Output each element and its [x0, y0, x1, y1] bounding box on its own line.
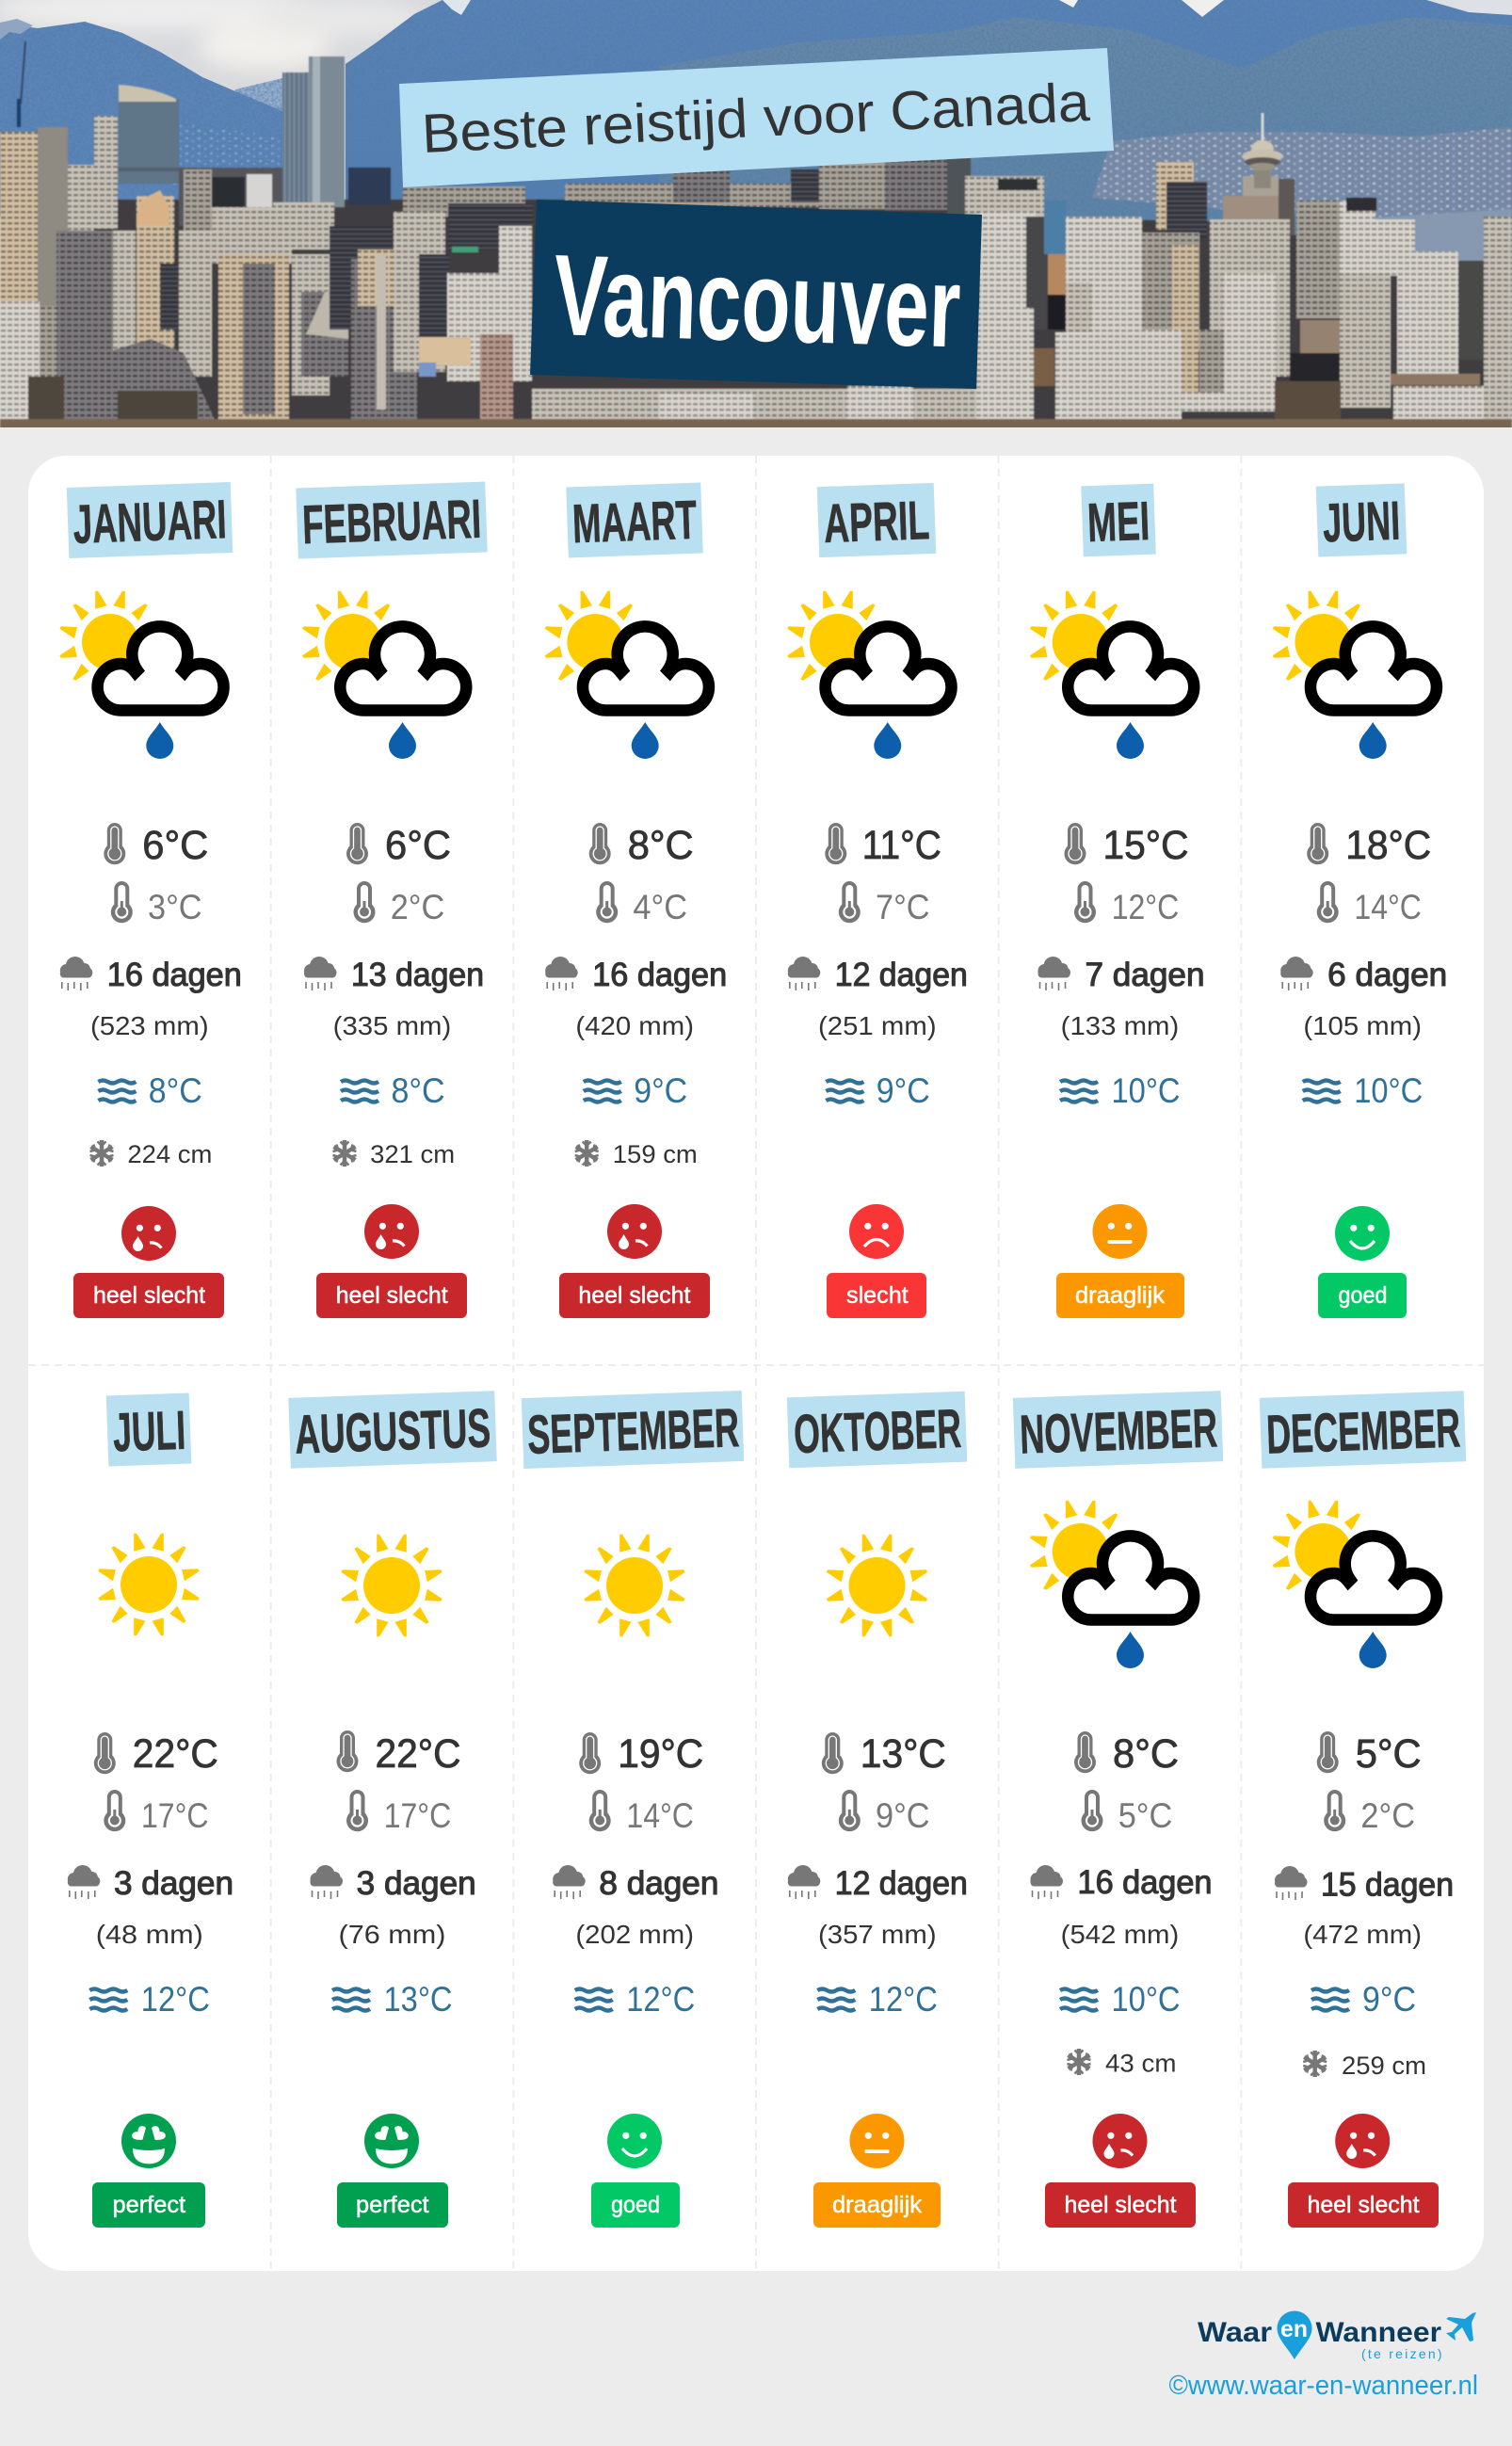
- rain days: 12 dagen: [835, 957, 968, 993]
- rating badge: [337, 2182, 448, 2228]
- water temperature: 9°C: [877, 1071, 930, 1110]
- rainfall: (335 mm): [333, 1011, 451, 1040]
- rating badge: [1056, 1273, 1184, 1318]
- rainfall: (76 mm): [339, 1920, 446, 1949]
- rating badge: goed: [1339, 1282, 1388, 1309]
- logo: Waar en Wanneer: en: [1280, 2316, 1308, 2342]
- max temperature: 18°C: [1345, 823, 1431, 868]
- min temperature: 2°C: [391, 888, 444, 926]
- rain days: 16 dagen: [107, 957, 242, 993]
- rainfall: (48 mm): [96, 1920, 203, 1949]
- rating face: [121, 1206, 176, 1261]
- icon: airplane: [1446, 2312, 1476, 2341]
- weather icon: [1030, 591, 1194, 759]
- water temperature: [332, 1980, 452, 2019]
- rain days: 13 dagen: [351, 957, 484, 993]
- rainfall: (420 mm): [575, 1011, 694, 1040]
- month heading: [817, 483, 936, 557]
- min temperature: [1074, 881, 1179, 926]
- max temperature: [94, 1731, 218, 1777]
- max temperature: [104, 823, 208, 868]
- clouds: [0, 0, 424, 70]
- rain days: 8 dagen: [599, 1865, 718, 1902]
- weather icon: [59, 591, 224, 759]
- min temperature: 4°C: [633, 888, 687, 926]
- water temperature: [584, 1071, 687, 1110]
- rating badge: heel slecht: [1307, 2192, 1420, 2218]
- rainfall: (472 mm): [1303, 1920, 1422, 1949]
- min temperature: [596, 881, 687, 926]
- city banner: [530, 200, 982, 389]
- rating badge: heel slecht: [93, 1282, 205, 1309]
- max temperature: 8°C: [1113, 1731, 1179, 1777]
- max temperature: 22°C: [375, 1731, 461, 1777]
- rain days: 3 dagen: [357, 1865, 476, 1902]
- panel: november: [1013, 1391, 1223, 2228]
- min temperature: 14°C: [1354, 888, 1422, 926]
- panel: januari: [59, 482, 242, 1318]
- water temperature: 12°C: [626, 1980, 695, 2019]
- panel: februari: [296, 482, 488, 1318]
- water temperature: [1060, 1980, 1181, 2019]
- max temperature: 19°C: [618, 1731, 703, 1777]
- rating badge: [813, 2182, 941, 2228]
- rain days: 3 dagen: [114, 1865, 233, 1902]
- min temperature: [104, 1790, 209, 1835]
- panel: juli: [68, 1392, 233, 2228]
- rating badge: [1318, 1273, 1407, 1318]
- rating badge: heel slecht: [336, 1282, 448, 1309]
- month heading: OKTOBER: [793, 1398, 962, 1465]
- min temperature: [354, 881, 444, 926]
- skyline buildings: [0, 41, 1512, 430]
- snowfall: [90, 1140, 212, 1168]
- rain days: 16 dagen: [1077, 1864, 1213, 1901]
- month heading: MEI: [1086, 491, 1150, 554]
- weather icon: [1273, 591, 1437, 759]
- header photo: Vancouver skyline: [0, 0, 1512, 430]
- max temperature: [589, 823, 694, 868]
- month heading: [288, 1391, 497, 1469]
- water temperature: [98, 1071, 202, 1110]
- weather icon: [1273, 1501, 1437, 1668]
- water temperature: [1303, 1071, 1423, 1110]
- panel: december: [1260, 1391, 1466, 2228]
- rating face: [1092, 2114, 1147, 2168]
- month heading: JANUARI: [72, 489, 228, 555]
- min temperature: [111, 881, 202, 926]
- rating badge: [559, 1273, 710, 1318]
- min temperature: 5°C: [1118, 1796, 1172, 1835]
- rating face: [1092, 1204, 1147, 1259]
- max temperature: 8°C: [628, 823, 694, 868]
- max temperature: 5°C: [1356, 1731, 1422, 1777]
- weather icon: [98, 1534, 200, 1635]
- panel: maart: [545, 483, 727, 1318]
- rating badge: slecht: [846, 1282, 909, 1309]
- snowfall: [333, 1140, 455, 1168]
- rating badge: perfect: [113, 2192, 185, 2218]
- rainfall: (133 mm): [1061, 1011, 1179, 1040]
- water temperature: [1311, 1980, 1416, 2019]
- water temperature: 12°C: [869, 1980, 938, 2019]
- panel: augustus: [288, 1391, 497, 2228]
- water temperature: 12°C: [141, 1980, 210, 2019]
- min temperature: 2°C: [1360, 1796, 1415, 1835]
- panel: september: [522, 1391, 744, 2228]
- month heading: [1013, 1391, 1223, 1469]
- month heading: [67, 482, 233, 558]
- weather icon: [545, 591, 709, 759]
- snowfall: 259 cm: [1342, 2052, 1426, 2080]
- panel: mei: [1030, 484, 1205, 1318]
- panel: april: [787, 483, 968, 1318]
- weather icon: [341, 1535, 442, 1636]
- month heading: JUNI: [1322, 491, 1401, 554]
- snowfall: [1303, 2051, 1426, 2080]
- max temperature: 13°C: [861, 1731, 946, 1777]
- water temperature: 10°C: [1354, 1071, 1423, 1110]
- max temperature: [337, 1730, 461, 1777]
- logo: Waar en Wanneer: Waar: [1198, 2317, 1272, 2348]
- min temperature: [1317, 881, 1422, 926]
- max temperature: [822, 1731, 946, 1777]
- rainfall: (523 mm): [90, 1011, 209, 1040]
- panel: oktober: [787, 1392, 968, 2228]
- rainfall: (105 mm): [1303, 1011, 1422, 1040]
- snow patches: [0, 0, 1512, 40]
- min temperature: [1324, 1790, 1415, 1835]
- max temperature: [1064, 823, 1188, 868]
- month heading: MAART: [571, 490, 698, 555]
- rating badge: [92, 2182, 205, 2228]
- min temperature: 14°C: [626, 1796, 694, 1835]
- snowfall: 224 cm: [127, 1140, 212, 1168]
- month heading: SEPTEMBER: [526, 1397, 740, 1466]
- icon: map pin: [1277, 2310, 1312, 2359]
- max temperature: [1317, 1731, 1422, 1777]
- month heading: APRIL: [823, 490, 930, 555]
- water temperature: 8°C: [392, 1071, 444, 1110]
- water temperature: 9°C: [634, 1071, 687, 1110]
- website credit: ©www.waar-en-wanneer.nl: [1169, 2371, 1478, 2401]
- max temperature: [1074, 1731, 1179, 1777]
- max temperature: 22°C: [133, 1731, 218, 1777]
- max temperature: 6°C: [142, 823, 208, 868]
- max temperature: 15°C: [1103, 823, 1188, 868]
- water temperature: 8°C: [149, 1071, 202, 1110]
- residential hillside: [169, 122, 1512, 292]
- water temperature: [575, 1980, 695, 2019]
- weather icon: [827, 1535, 927, 1636]
- rating badge: [1288, 2182, 1439, 2228]
- rating badge: [827, 1273, 926, 1318]
- rating face: [607, 1204, 662, 1259]
- min temperature: 17°C: [384, 1796, 451, 1835]
- weather icon: [787, 591, 952, 759]
- min temperature: 12°C: [1112, 888, 1179, 926]
- rating badge: [73, 1273, 224, 1318]
- rating badge: goed: [611, 2192, 660, 2218]
- min temperature: 3°C: [148, 888, 202, 926]
- rating badge: [1045, 2182, 1196, 2228]
- city banner: Vancouver: [552, 231, 962, 372]
- max temperature: 6°C: [385, 823, 451, 868]
- rain days: 15 dagen: [1321, 1866, 1454, 1904]
- month heading: [106, 1392, 191, 1467]
- month heading: [1081, 484, 1156, 556]
- water temperature: [341, 1071, 444, 1110]
- weather icon: [302, 591, 466, 759]
- title banner: Beste reistijd voor Canada: [421, 72, 1092, 165]
- min temperature: [839, 881, 930, 926]
- panel: juni: [1273, 483, 1447, 1318]
- max temperature: [825, 823, 941, 868]
- rating face: [607, 2114, 662, 2168]
- min temperature: [839, 1790, 930, 1835]
- min temperature: [589, 1790, 694, 1835]
- rating badge: heel slecht: [578, 1282, 690, 1309]
- snowfall: 321 cm: [370, 1140, 455, 1168]
- rainfall: (357 mm): [818, 1920, 937, 1949]
- month heading: [566, 483, 703, 557]
- month heading: [522, 1391, 744, 1469]
- logo: Waar en Wanneer: Wanneer: [1316, 2317, 1441, 2348]
- water temperature: 10°C: [1111, 1071, 1181, 1110]
- rain days: 7 dagen: [1085, 957, 1205, 993]
- rating face: [849, 2114, 904, 2168]
- rating face: [121, 2114, 176, 2168]
- snowfall: 43 cm: [1105, 2049, 1177, 2077]
- rating badge: perfect: [356, 2192, 429, 2218]
- rain days: 16 dagen: [592, 957, 727, 993]
- logo: Waar en Wanneer: [1198, 2310, 1476, 2361]
- rating face: [364, 1204, 419, 1259]
- month heading: [787, 1392, 967, 1468]
- month heading: AUGUSTUS: [294, 1397, 491, 1466]
- mountains: [0, 0, 1512, 254]
- water temperature: [89, 1980, 210, 2019]
- rating face: [1335, 1206, 1390, 1261]
- rating face: [1335, 2114, 1390, 2168]
- min temperature: 17°C: [141, 1796, 209, 1835]
- rating badge: draaglijk: [832, 2192, 923, 2218]
- month heading: FEBRUARI: [301, 489, 482, 555]
- rainfall: (251 mm): [818, 1011, 937, 1040]
- rainfall: (542 mm): [1061, 1920, 1179, 1949]
- rain days: 6 dagen: [1327, 957, 1447, 993]
- min temperature: 9°C: [876, 1796, 930, 1835]
- min temperature: [346, 1790, 451, 1835]
- rating face: [364, 2114, 419, 2168]
- panel: climate table: [28, 456, 1484, 2271]
- month heading: [1316, 483, 1407, 557]
- month heading: [296, 482, 488, 558]
- snowfall: 159 cm: [613, 1140, 698, 1168]
- rating face: [849, 1204, 904, 1259]
- water temperature: 13°C: [384, 1980, 452, 2019]
- weather icon: [584, 1535, 685, 1636]
- rating badge: [316, 1273, 467, 1318]
- rain days: 12 dagen: [835, 1865, 968, 1902]
- max temperature: [1307, 823, 1431, 868]
- title banner: [399, 48, 1114, 187]
- max temperature: [579, 1731, 703, 1777]
- water temperature: [826, 1071, 930, 1110]
- min temperature: 7°C: [876, 888, 930, 926]
- max temperature: 11°C: [862, 823, 941, 868]
- month heading: JULI: [112, 1400, 186, 1463]
- weather icon: [1030, 1501, 1194, 1668]
- rating badge: draaglijk: [1075, 1282, 1166, 1309]
- water temperature: [817, 1980, 938, 2019]
- rainfall: (202 mm): [575, 1920, 694, 1949]
- snowfall: [575, 1140, 698, 1168]
- month heading: NOVEMBER: [1019, 1397, 1218, 1466]
- water temperature: [1060, 1071, 1181, 1110]
- rating badge: [591, 2182, 680, 2228]
- logo: Waar en Wanneer: (te reizen): [1361, 2346, 1442, 2361]
- snowfall: [1068, 2049, 1177, 2077]
- rating badge: heel slecht: [1064, 2192, 1177, 2218]
- max temperature: [346, 823, 451, 868]
- water temperature: 10°C: [1111, 1980, 1181, 2019]
- water temperature: 9°C: [1362, 1980, 1416, 2019]
- min temperature: [1081, 1790, 1172, 1835]
